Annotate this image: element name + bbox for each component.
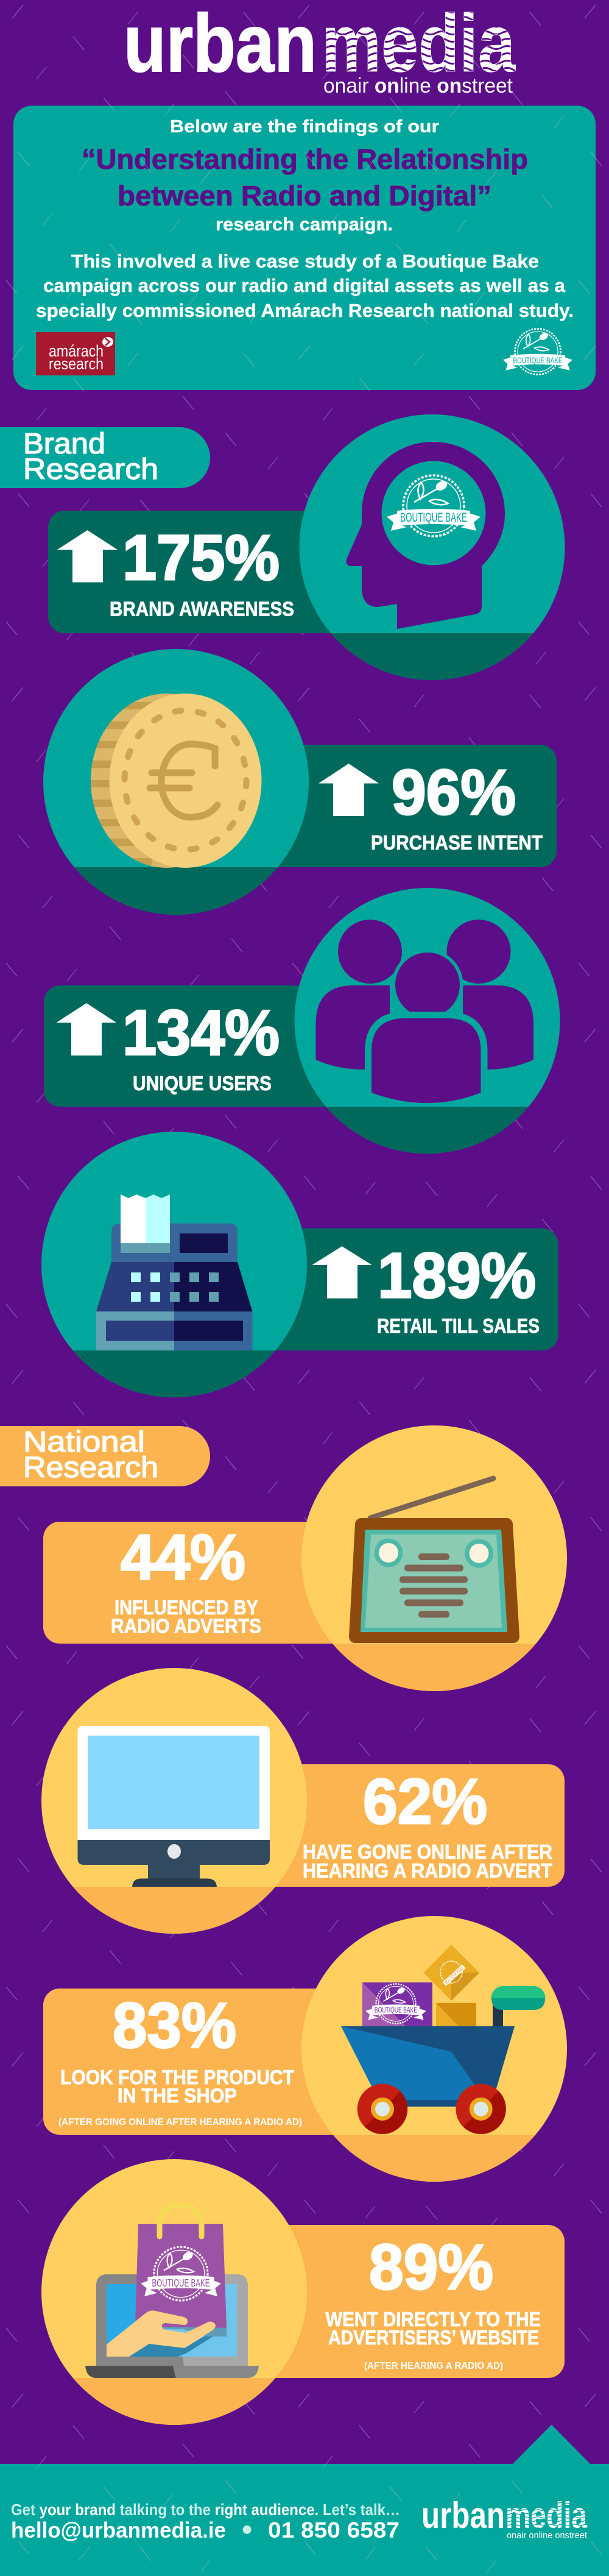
icon: desktop monitor (41, 1668, 307, 1934)
logo: urbanmedia: urban (124, 0, 317, 89)
logo: boutique bake on panel (503, 329, 572, 374)
panel: intro: between Radio and Digital” (118, 180, 491, 211)
logo: footer urbanmedia: urban (421, 2495, 505, 2536)
footer band (0, 2425, 609, 2576)
stat bar: WENT DIRECTLY TO THE (325, 2308, 541, 2330)
stat bar: PURCHASE INTENT (371, 831, 543, 854)
stat bar: RADIO ADVERTS (111, 1615, 261, 1637)
icon: three users (295, 888, 560, 1154)
panel: intro: “Understanding the Relationship (82, 143, 528, 175)
heading: national research: Research (23, 1452, 158, 1484)
logo: urbanmedia: media (322, 0, 516, 89)
footer text (11, 2500, 400, 2542)
stat bar (48, 511, 389, 633)
stat bar: (AFTER GOING ONLINE AFTER HEARING A RADIO AD) (58, 2117, 302, 2127)
stat bar (231, 745, 557, 867)
stat bar (231, 1229, 558, 1350)
heading: national research (0, 1426, 210, 1486)
stat bar (43, 1522, 384, 1644)
footer text: Get your brand talking to the right audience. Let’s talk… (11, 2500, 400, 2519)
stat bar (231, 2225, 565, 2378)
icon: shopping cart: BOUTIQUE BAKE (443, 1965, 465, 1985)
icon: head with logo (300, 414, 565, 680)
stat bar: LOOK FOR THE PRODUCT (60, 2066, 294, 2088)
logo: urbanmedia (124, 0, 516, 98)
icon: cash register (41, 1132, 307, 1397)
panel: intro: Below are the findings of our (170, 117, 439, 137)
stat bar: HAVE GONE ONLINE AFTER (303, 1840, 552, 1863)
panel: intro: research campaign. (216, 215, 393, 235)
stat bar: 96% (392, 757, 516, 828)
stat bar: IN THE SHOP (118, 2084, 237, 2107)
footer text: 01 850 6587 (268, 2517, 400, 2542)
heading: national research: National (23, 1426, 145, 1458)
panel: purchase intent (43, 649, 557, 915)
panel: intro: campaign across our radio and digital assets as well as a (43, 275, 566, 296)
stat bar: BRAND AWARENESS (110, 597, 294, 620)
heading: brand research: Brand (23, 428, 105, 460)
panel: went directly to website (41, 2159, 565, 2425)
panel: unique users (44, 888, 560, 1154)
stat bar: 89% (369, 2232, 493, 2303)
logo: boutique bake on panel: BOUTIQUE BAKE (513, 356, 563, 366)
logo: urbanmedia: onair online onstreet (323, 74, 513, 98)
stat bar: 62% (363, 1766, 487, 1837)
panel: gone online (41, 1668, 565, 1934)
stat bar: UNIQUE USERS (133, 1072, 272, 1095)
stat bar: 134% (122, 997, 280, 1069)
icon: shopping cart: BOUTIQUE BAKE (375, 2005, 417, 2014)
panel: look for the product (43, 1916, 567, 2182)
logo: footer urbanmedia: onair online onstreet (507, 2530, 588, 2541)
icon: head with logo: BOUTIQUE BAKE (400, 511, 467, 525)
stat bar: 83% (113, 1990, 236, 2061)
stat bar (231, 1764, 565, 1887)
footer text: hello@urbanmedia.ie (11, 2517, 226, 2542)
panel: intro: specially commissioned Amárach Research national study. (36, 300, 574, 321)
logo: amarach research: amárach (49, 342, 104, 360)
stat bar: 175% (122, 522, 280, 594)
panel: intro: This involved a live case study of a Boutique Bake (71, 250, 539, 272)
stat bar (43, 1989, 384, 2135)
stat bar: INFLUENCED BY (114, 1596, 258, 1619)
heading: brand research: Research (23, 453, 158, 486)
stat bar (44, 985, 385, 1107)
stat bar: 189% (378, 1240, 536, 1311)
panel: brand awareness (48, 414, 565, 680)
icon: shopping cart (301, 1916, 567, 2182)
panel: influenced by radio adverts (43, 1425, 567, 1691)
logo: amarach research: research (49, 355, 104, 373)
heading: brand research (0, 427, 210, 488)
stat bar: ADVERTISERS’ WEBSITE (328, 2326, 539, 2349)
logo: amarach research (36, 332, 115, 375)
stat bar: RETAIL TILL SALES (377, 1315, 540, 1337)
panel: retail till sales (41, 1132, 558, 1397)
stat bar: 44% (121, 1522, 245, 1593)
logo: footer urbanmedia (421, 2495, 588, 2541)
icon: euro coin (43, 649, 309, 915)
icon: laptop and shopping bag (41, 2159, 307, 2425)
stat bar: (AFTER HEARING A RADIO AD) (364, 2361, 503, 2371)
icon: radio (301, 1425, 567, 1691)
panel: intro (13, 106, 596, 390)
stat bar: HEARING A RADIO ADVERT (303, 1859, 552, 1882)
logo: footer urbanmedia: media (505, 2495, 587, 2536)
icon: laptop and shopping bag: BOUTIQUE BAKE (152, 2277, 210, 2289)
